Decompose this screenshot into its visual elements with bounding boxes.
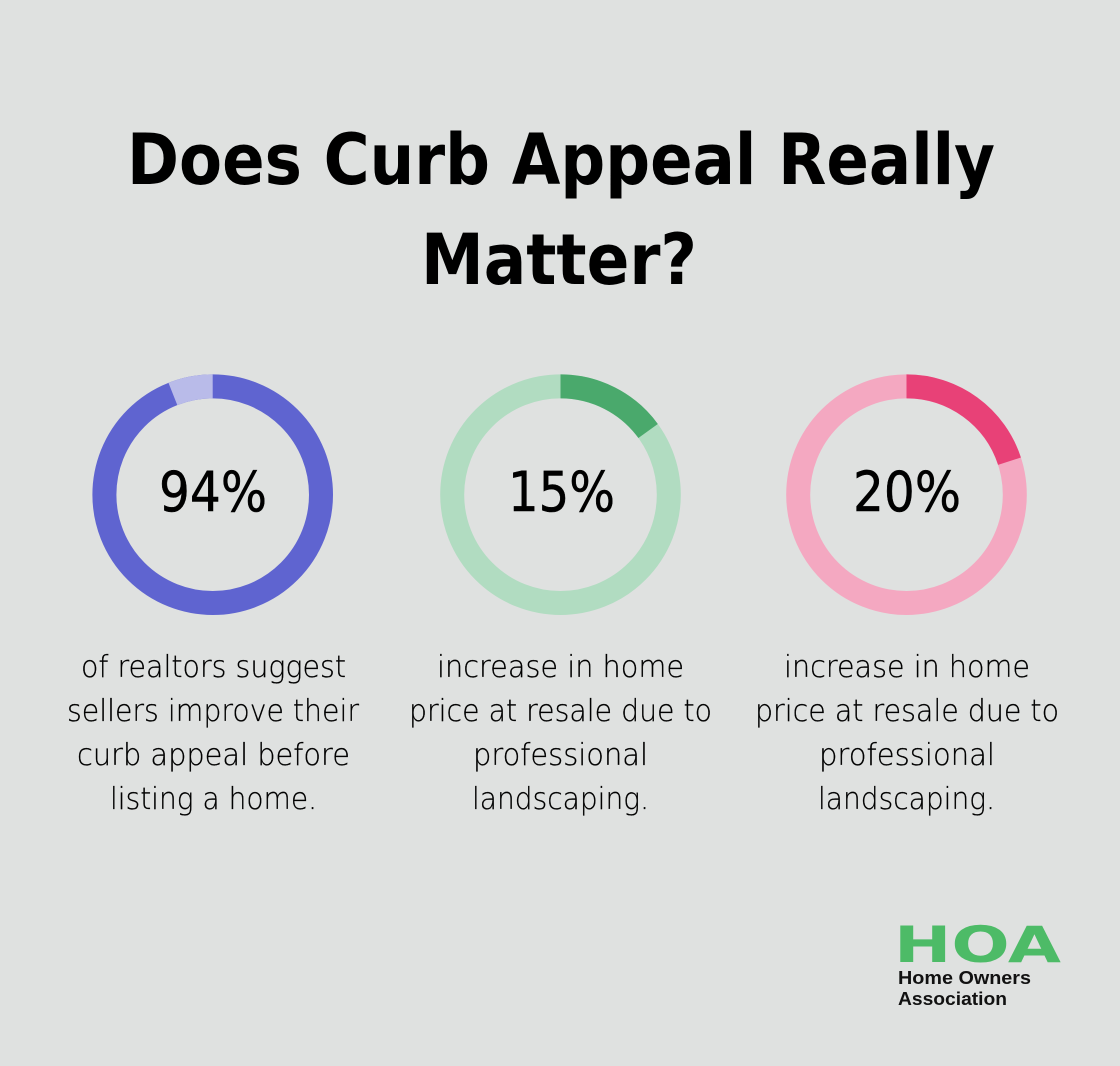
description: landscaping resale: price at resale due to [409,694,712,729]
description: landscaping resale: increase in home [784,650,1030,685]
description: landscaping resale: professional [473,738,648,773]
logo: HOA Home Owners Association: HOA [894,916,1062,974]
description: landscaping resale: price at resale due to [755,694,1059,729]
value: 15%: 15% [508,460,615,524]
panel: 94% of realtors [67,386,359,817]
logo: HOA Home Owners Association: Association [898,988,1007,1009]
title: Matter? [421,219,697,301]
title: Does Curb Appeal Really [127,119,995,201]
description: realtors: sellers improve their [67,694,359,729]
description: realtors: listing a home. [110,782,317,817]
description: realtors [67,650,359,817]
description: landscaping resale: landscaping. [818,782,995,817]
value: 94%: 94% [159,460,267,524]
panel: 15% home price [409,386,712,817]
description: landscaping resale: landscaping. [472,782,649,817]
logo: HOA Home Owners Association [894,916,1062,1009]
panel: 20% home price [755,386,1059,817]
logo: HOA Home Owners Association: Home Owners [898,967,1031,988]
description: landscaping resale: professional [819,738,995,773]
description: realtors: of realtors suggest [81,650,346,685]
donut chart: 94% [104,386,321,603]
description: landscaping resale [409,650,712,817]
value: 20%: 20% [853,460,961,524]
description: landscaping resale [755,650,1059,817]
description: realtors: curb appeal before [77,738,350,773]
description: landscaping resale: increase in home [437,650,684,685]
donut chart: 15% [452,386,669,603]
donut chart: 20% [798,386,1015,603]
title [127,119,995,301]
